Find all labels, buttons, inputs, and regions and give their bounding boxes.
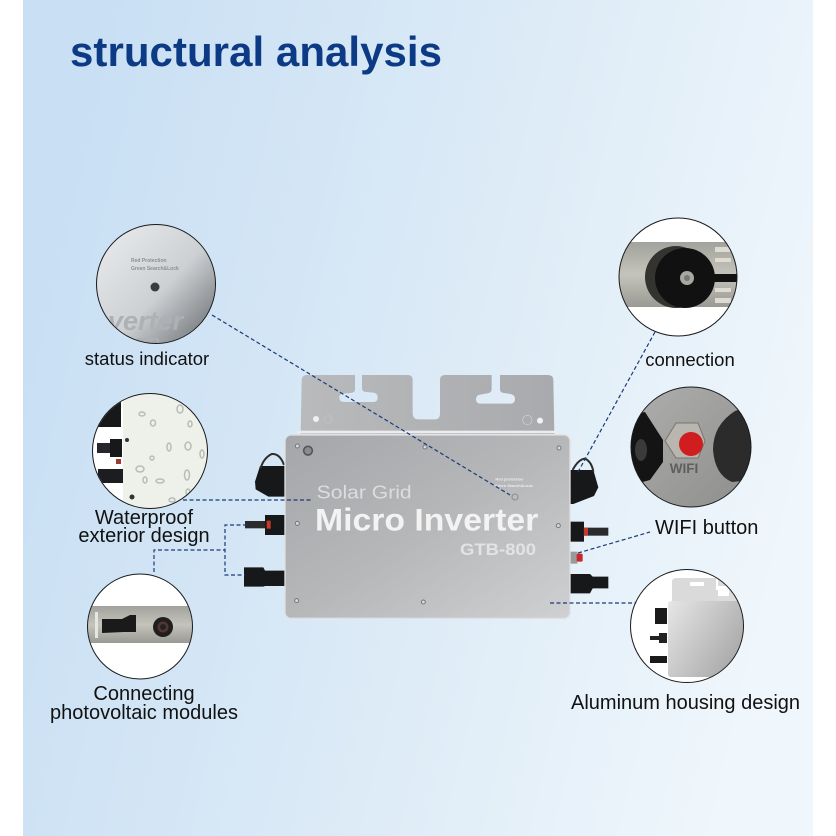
right connectors (568, 459, 608, 593)
circle photo: water droplets (92, 393, 208, 509)
body printed text: status legend (495, 477, 534, 488)
callout: connection (619, 218, 737, 370)
circle photo: red button: WIFI (670, 461, 698, 476)
circle photo: status LED: Red Protection (131, 258, 167, 264)
circle photo: PV ports (87, 574, 193, 680)
callout: status indicator (85, 224, 216, 369)
circle photo: status LED: TB (137, 335, 161, 355)
inverter body (285, 435, 570, 618)
left connectors (244, 454, 285, 587)
label: Connecting (93, 683, 195, 705)
bracket holes (313, 415, 543, 425)
circle photo: cable gland (619, 218, 737, 336)
label: Waterproof (95, 507, 194, 529)
label: Aluminum housing design (571, 692, 800, 714)
circle photo: status LED: Green Search&Lock (131, 266, 179, 272)
callout: connecting photovoltaic modules (50, 574, 238, 724)
mounting bracket (301, 375, 554, 434)
circle photo: red button (631, 387, 752, 507)
label: exterior design (78, 525, 210, 547)
bracket highlight (297, 431, 558, 433)
body printed text: micro inverter: Micro Inverter (315, 503, 538, 538)
body printed text: status legend: Green Search&Lock (495, 483, 534, 488)
callout: wifi button (631, 387, 758, 539)
circle photo: status LED: verter (108, 306, 185, 336)
body screws (295, 444, 561, 604)
title: structural analysis (70, 28, 442, 75)
circle photo: status LED (97, 225, 215, 343)
circle photo: housing (630, 569, 748, 683)
body printed text: model: GTB-800 (460, 540, 536, 559)
callout: aluminum housing (571, 569, 800, 714)
callout: waterproof exterior (78, 393, 210, 547)
body printed text: status legend: Red protection (495, 477, 524, 482)
label: connection (645, 349, 735, 370)
label: status indicator (85, 348, 209, 369)
label: photovoltaic modules (50, 702, 238, 724)
body printed text: solar grid: Solar Grid (317, 481, 412, 502)
product: micro inverter (244, 375, 608, 618)
dashed leader lines (154, 315, 655, 603)
label: WIFI button (655, 517, 758, 539)
